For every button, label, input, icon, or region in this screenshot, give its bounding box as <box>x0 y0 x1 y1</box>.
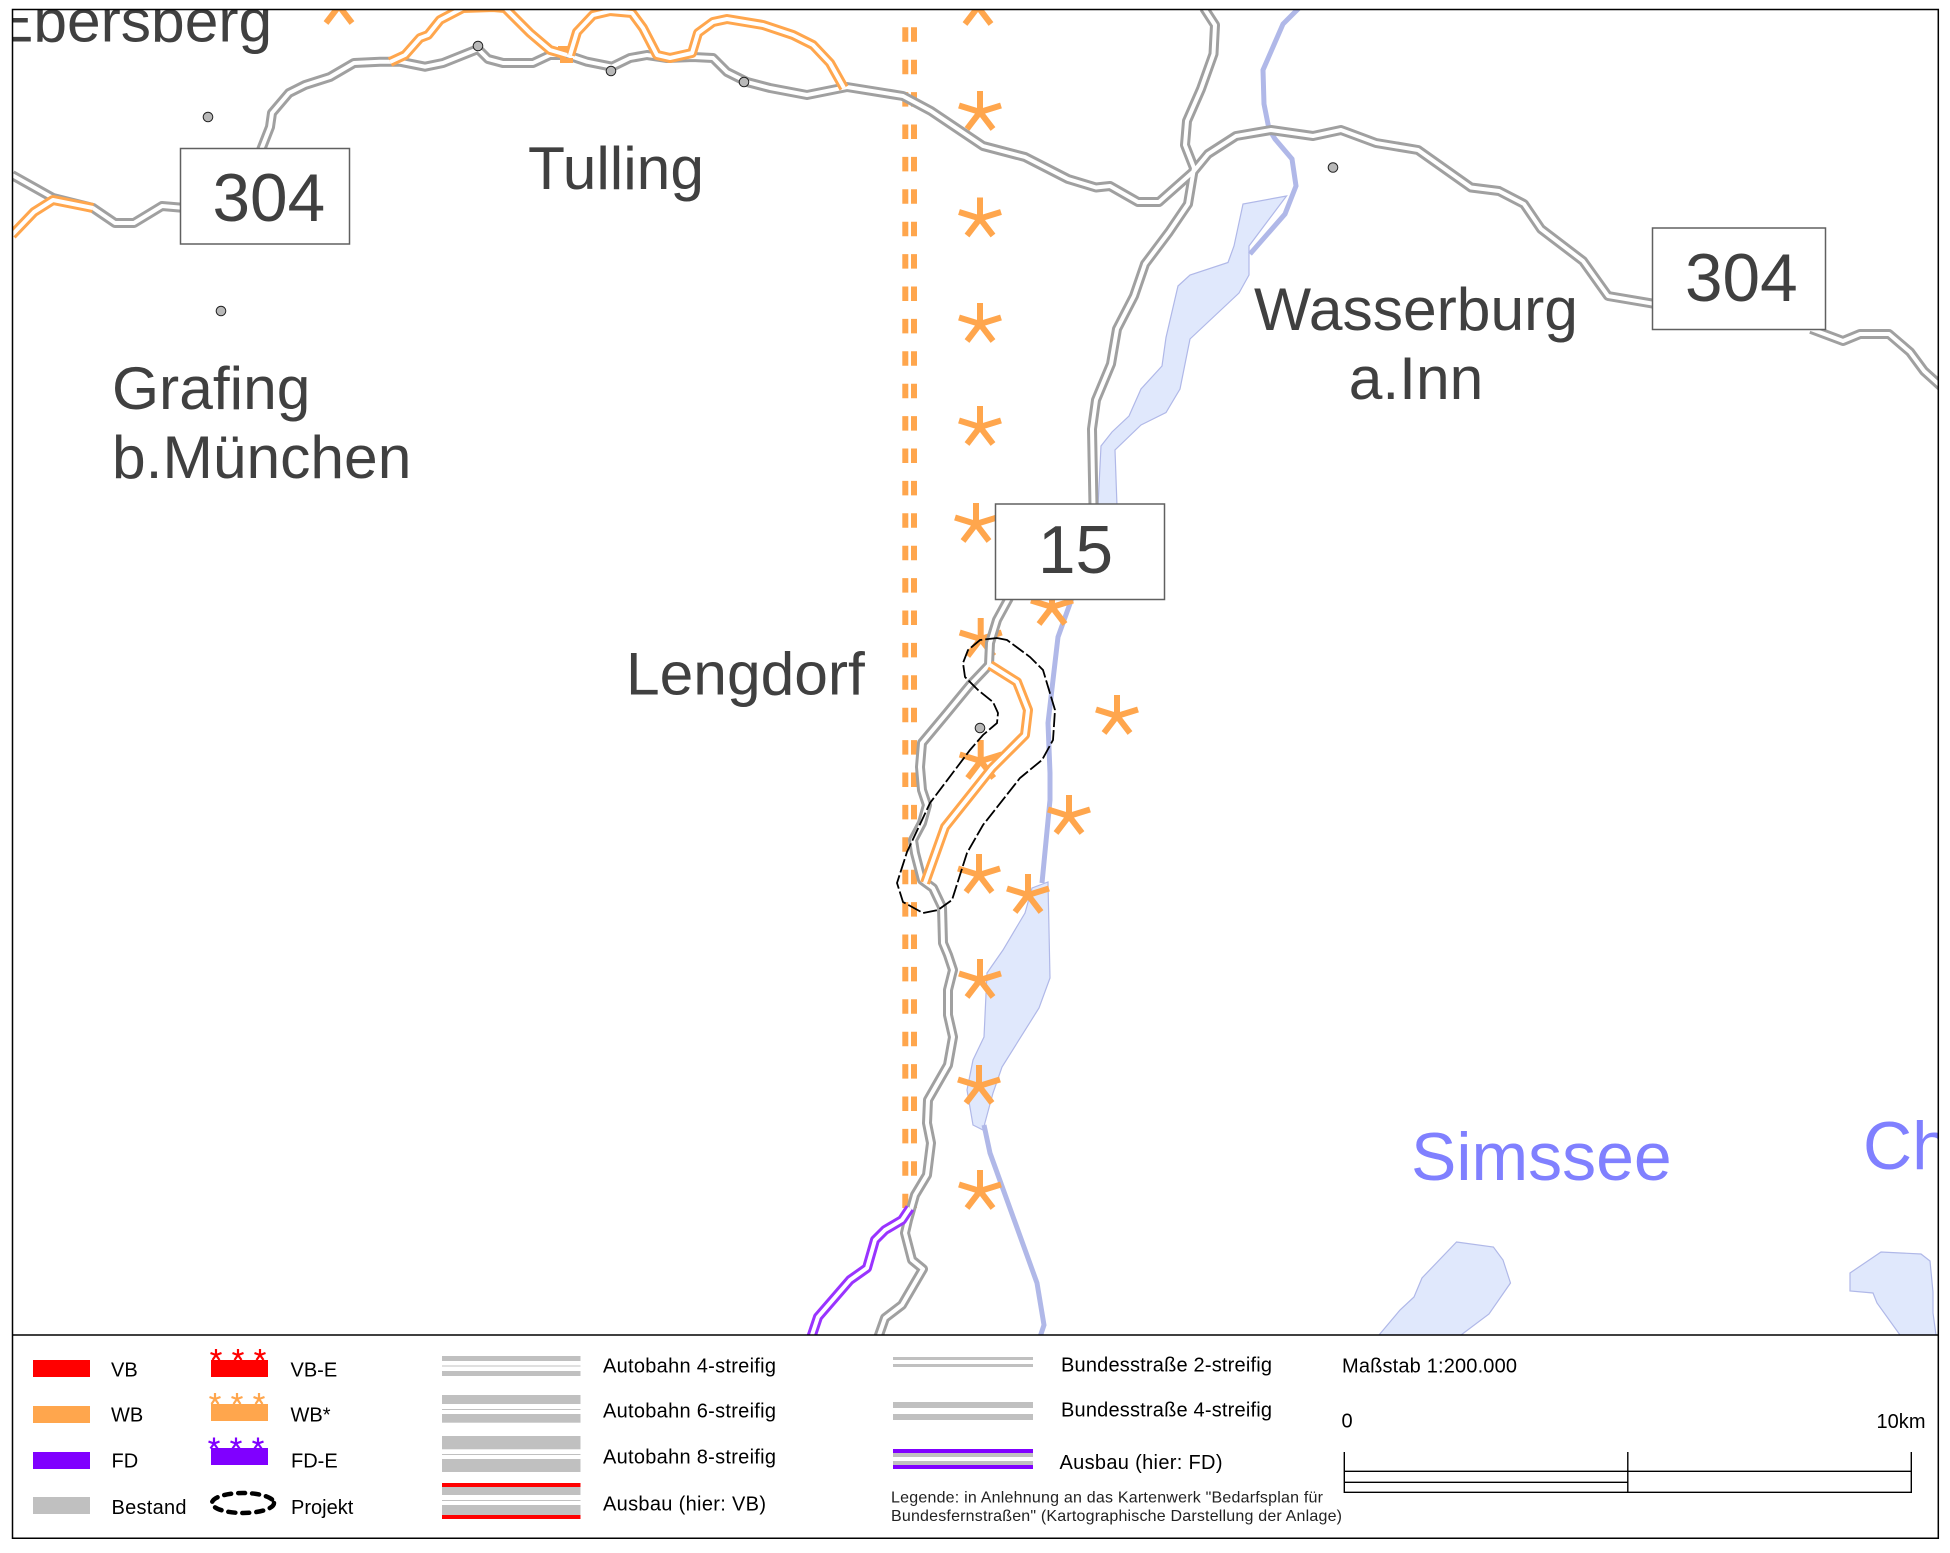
road shield: 304 west <box>180 148 350 244</box>
lake label: Chiemsee cut off: Ch <box>1863 1108 1950 1184</box>
lake: Simssee <box>1379 1242 1510 1335</box>
legend: VB <box>33 1360 138 1382</box>
project line: dashed orange <box>905 27 914 1208</box>
lake: Chiemsee <box>1850 1252 1936 1335</box>
legend: Bestand <box>33 1497 186 1519</box>
legend: Projekt <box>212 1493 354 1519</box>
legend: WB <box>33 1405 143 1427</box>
legend: WB: WB <box>111 1405 143 1427</box>
road shield: 304 west: 304 <box>212 161 325 236</box>
legend: Ausbau VB: Ausbau (hier: VB) <box>603 1494 766 1516</box>
legend: Bundesstrasse 2-streifig <box>893 1355 1272 1377</box>
scale bar: 0 <box>1342 1410 1353 1432</box>
place label: Grafing b.München: b.München <box>112 423 411 491</box>
orange road upgrades <box>12 7 1028 883</box>
scale bar <box>1342 1410 1926 1492</box>
legend: Autobahn 6-streifig: Autobahn 6-streifig <box>603 1401 776 1423</box>
legend: VB: VB <box>111 1360 138 1382</box>
place label: Lengdorf: Lengdorf <box>626 640 865 708</box>
project boundary dashed <box>897 638 1055 913</box>
legend: FD-E: FD-E <box>291 1451 338 1473</box>
legend: WB star <box>210 1393 331 1427</box>
legend: WB star: WB* <box>290 1405 331 1427</box>
legend: FD-E <box>208 1438 338 1473</box>
lake label: Simssee: Simssee <box>1411 1119 1672 1195</box>
scale bar: 10km <box>1876 1411 1926 1433</box>
legend note <box>891 1490 1342 1525</box>
legend: Projekt: Projekt <box>291 1497 354 1519</box>
legend: Ausbau FD: Ausbau (hier: FD) <box>1060 1452 1222 1474</box>
legend: Bundesstrasse 4-streifig <box>893 1400 1272 1422</box>
scale label: Maßstab 1:200.000 <box>1342 1355 1517 1377</box>
purple road upgrade <box>811 1208 910 1338</box>
river Inn <box>984 8 1299 1337</box>
road shield: 15 <box>996 504 1164 600</box>
place label: Grafing b.München <box>115 366 408 479</box>
road shield: 304 east: 304 <box>1685 241 1798 316</box>
legend: Autobahn 4-streifig <box>442 1355 776 1377</box>
legend: Ausbau VB <box>442 1483 766 1519</box>
lake: Inn reservoir north <box>1098 196 1286 506</box>
legend: VB-E <box>210 1349 337 1382</box>
project stars <box>318 0 1138 1208</box>
legend <box>33 1349 1926 1525</box>
place label: Wasserburg a.Inn <box>1254 286 1574 400</box>
legend: Autobahn 8-streifig <box>442 1436 776 1472</box>
legend: VB-E: VB-E <box>290 1360 337 1382</box>
road shield: 304 east <box>1652 228 1826 330</box>
legend: Autobahn 4-streifig: Autobahn 4-streifig <box>603 1355 776 1377</box>
place label: Grafing b.München: Grafing <box>112 354 310 422</box>
lakes <box>967 196 1936 1335</box>
road shield: 15: 15 <box>1038 513 1113 588</box>
legend: FD <box>33 1451 138 1473</box>
legend: FD: FD <box>112 1451 138 1473</box>
legend: Ausbau FD <box>893 1449 1222 1474</box>
place label: Wasserburg a.Inn: Wasserburg <box>1254 275 1578 343</box>
legend note: Bundesfernstraßen" (Kartographische Darstellung der Anlage) <box>891 1508 1342 1525</box>
place label: Wasserburg a.Inn: a.Inn <box>1349 344 1483 412</box>
legend note: Legende: in Anlehnung an das Kartenwerk "Bedarfsplan für <box>891 1490 1324 1507</box>
legend: Bundesstrasse 2-streifig: Bundesstraße 2-streifig <box>1061 1355 1272 1377</box>
place dots <box>203 41 1338 733</box>
legend: Autobahn 8-streifig: Autobahn 8-streifig <box>603 1447 776 1469</box>
legend: Autobahn 6-streifig <box>442 1395 776 1423</box>
legend: Bundesstrasse 4-streifig: Bundesstraße 4-streifig <box>1061 1400 1272 1422</box>
lake: Inn reservoir south <box>967 882 1050 1130</box>
legend: Bestand: Bestand <box>112 1497 186 1519</box>
place label: Tulling: Tulling <box>528 134 704 202</box>
